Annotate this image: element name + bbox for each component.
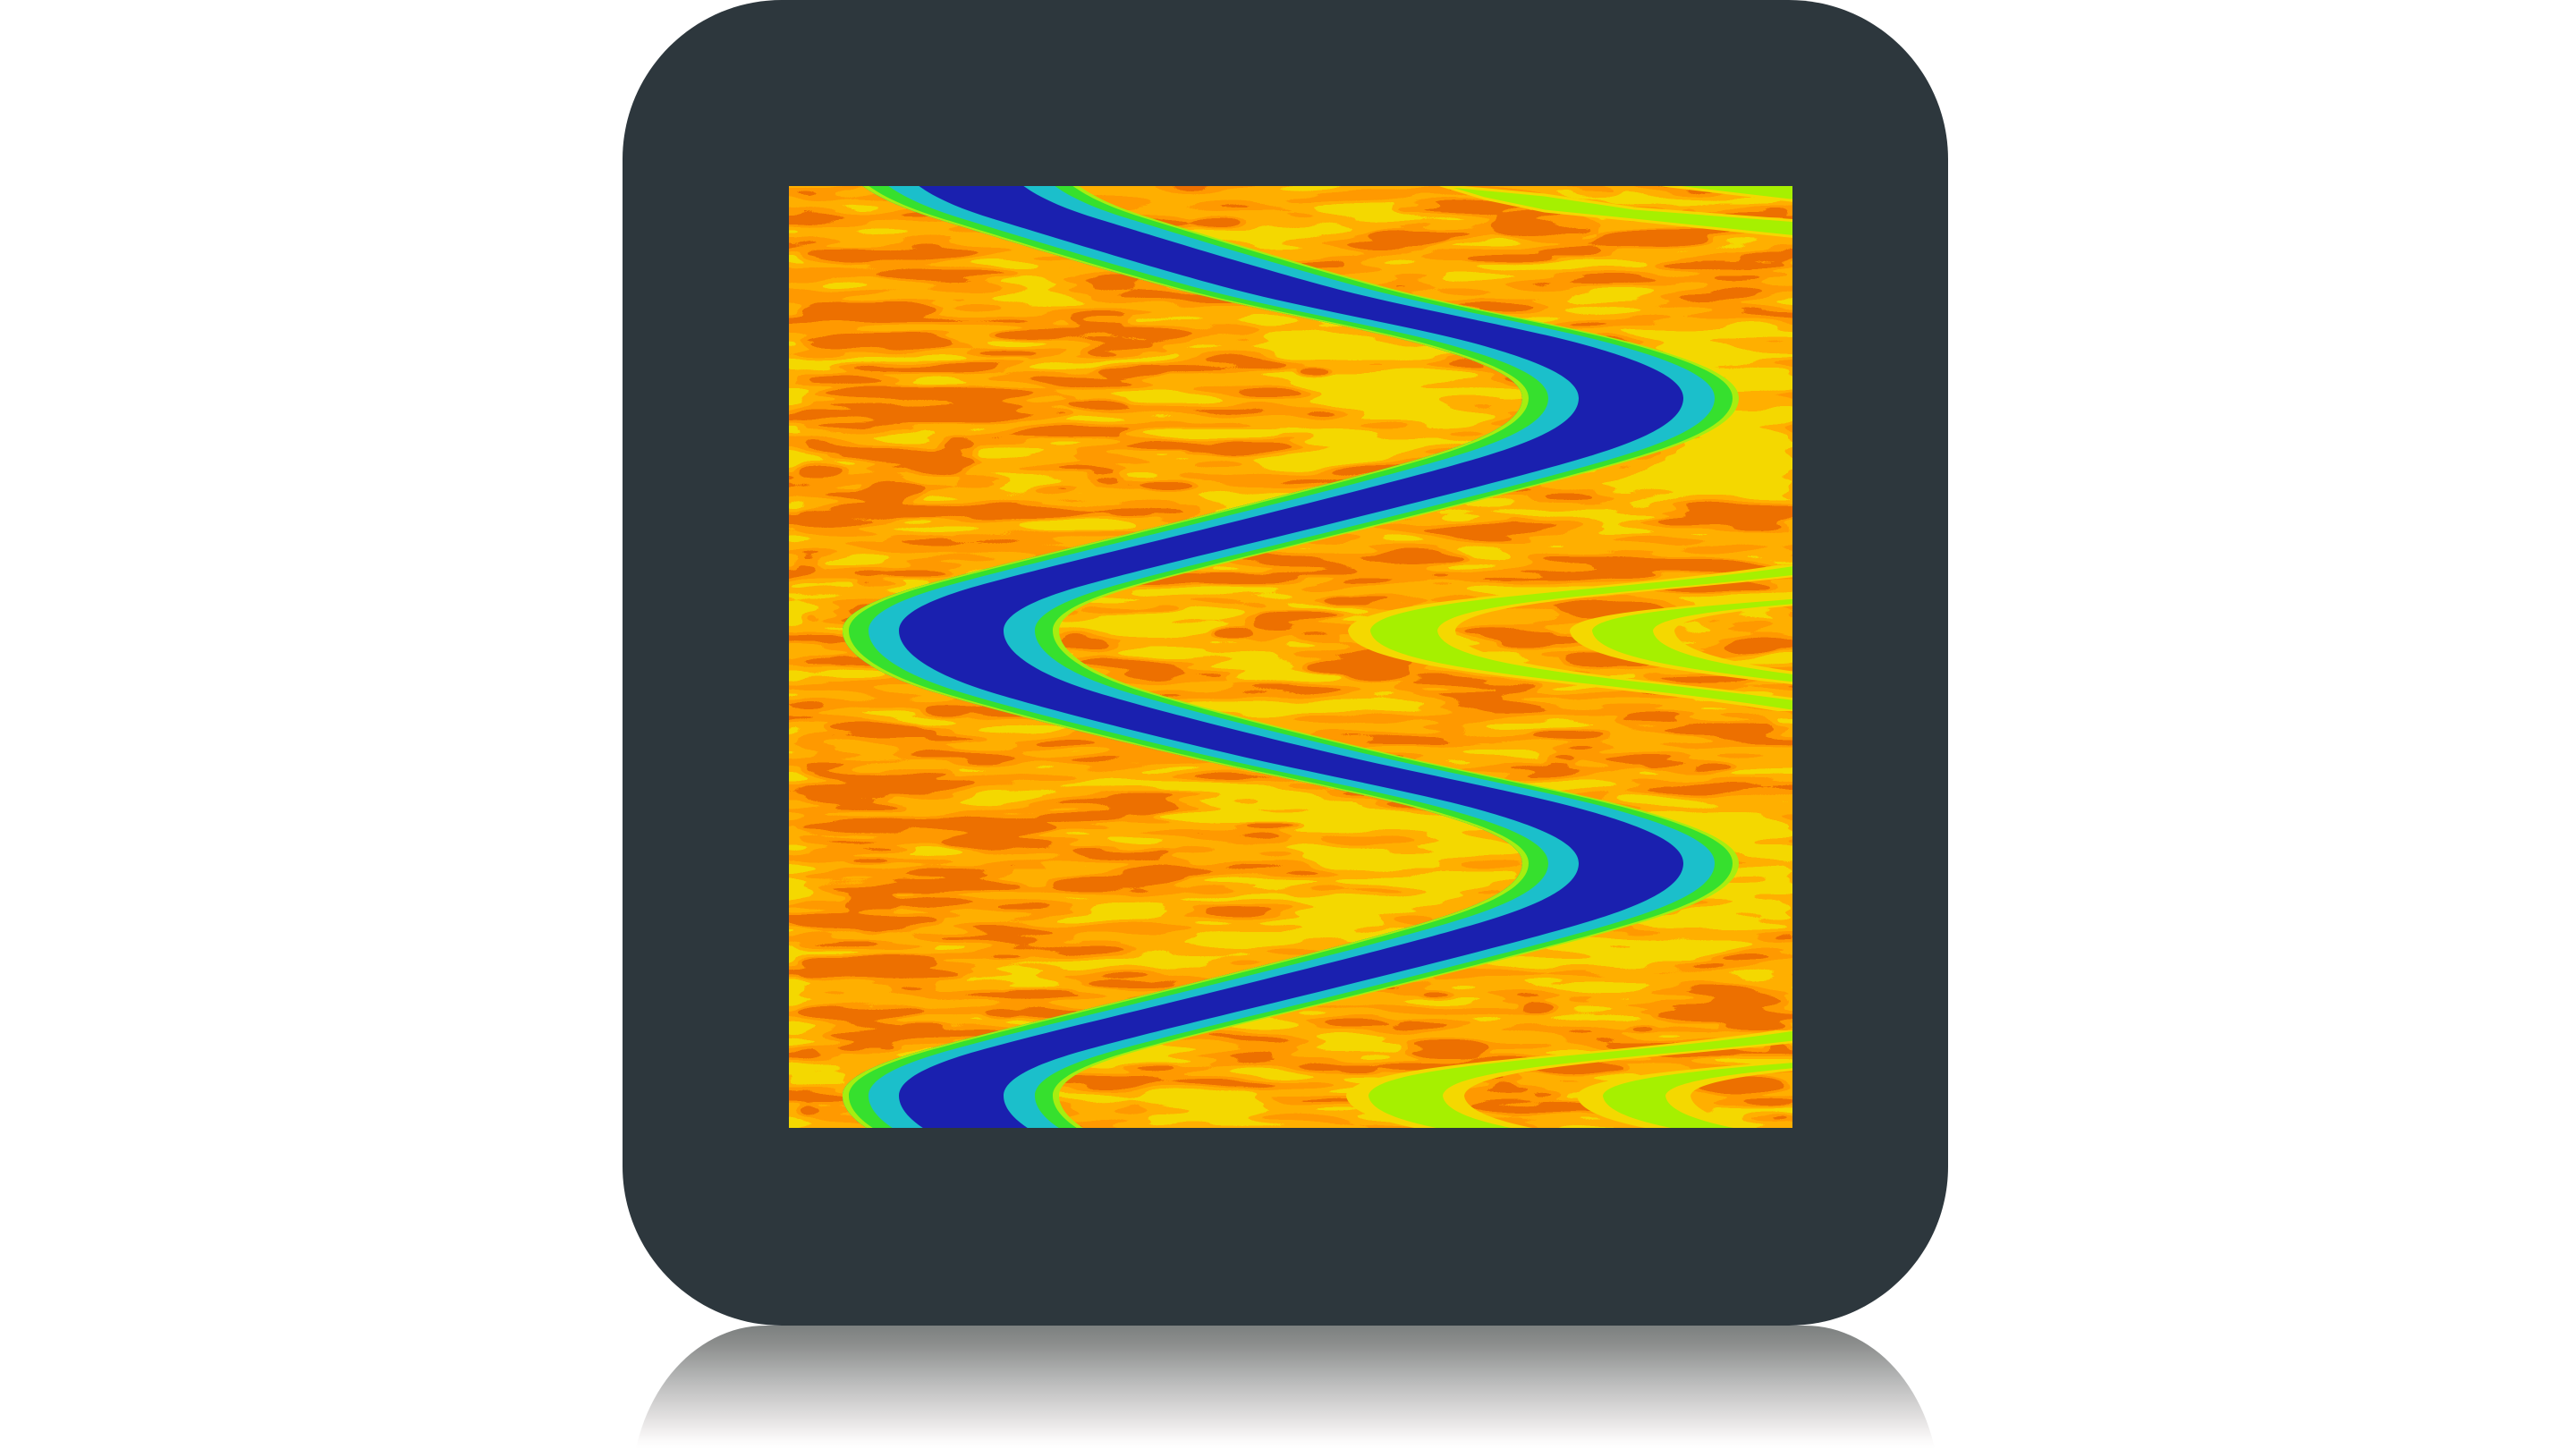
main blue wave with cyan and green bands bbox=[843, 186, 1739, 1128]
secondary lime waves: middle bbox=[1348, 565, 1792, 711]
panel: dark rounded card bbox=[623, 0, 1948, 1326]
chart: wave heatmap bbox=[789, 186, 1792, 1128]
secondary lime waves: bottom bbox=[1346, 1030, 1792, 1128]
heatmap noise background bbox=[789, 186, 1792, 1128]
secondary lime waves: top right bbox=[1440, 184, 1798, 237]
reflection of the card bbox=[631, 1326, 1939, 1449]
